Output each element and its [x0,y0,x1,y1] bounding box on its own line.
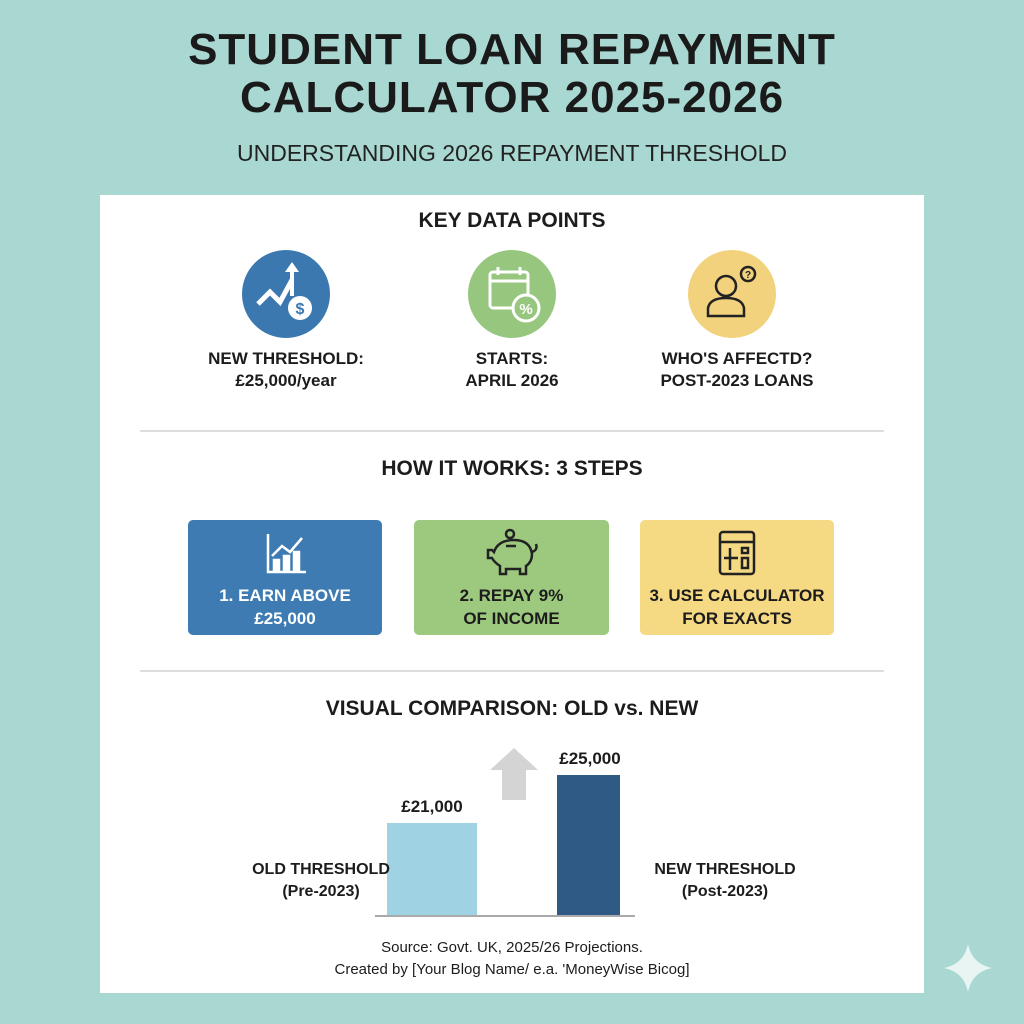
label: old: (Pre-2023) [282,883,360,900]
icon: calendar: % [519,301,533,318]
panel: main [100,195,924,993]
bar chart [252,748,796,917]
icon: threshold: $ [296,301,305,318]
title [188,25,836,122]
step 3: 3. USE CALCULATOR [649,586,825,605]
title: STUDENT LOAN REPAYMENT [188,25,836,74]
text: new threshold [208,349,364,390]
source text: Source: Govt. UK, 2025/26 Projections. [381,939,643,956]
bar chart: £21,000 [401,797,463,816]
icon: threshold [242,250,330,338]
text: who's affected: WHO'S AFFECTD? [662,349,812,368]
label: new: (Post-2023) [682,883,768,900]
source text [334,939,689,978]
icon: sparkle [944,944,992,992]
step 1: £25,000 [254,609,316,628]
subtitle: UNDERSTANDING 2026 REPAYMENT THRESHOLD [237,140,787,166]
label: new: NEW THRESHOLD [654,861,796,878]
source text: Created by [Your Blog Name/ e.a. 'MoneyWise Bicog] [334,961,689,978]
text: starts: STARTS: [476,349,548,368]
icon: person question [688,250,776,338]
heading: visual comparison: VISUAL COMPARISON: OLD vs. NEW [326,697,698,720]
text: starts [465,349,559,390]
step 2 [414,520,609,635]
text: who's affected [660,349,814,390]
bar: old [387,823,477,915]
step 1 [188,520,382,635]
title: CALCULATOR 2025-2026 [240,73,784,122]
label: old: OLD THRESHOLD [252,861,390,878]
heading: how it works: HOW IT WORKS: 3 STEPS [381,457,643,480]
icon: person question: ? [745,270,751,281]
step 2: OF INCOME [463,609,560,628]
step 1: 1. EARN ABOVE [219,586,351,605]
step 3: FOR EXACTS [682,609,792,628]
icon: calculator [718,530,756,576]
text: who's affected: POST-2023 LOANS [660,371,814,390]
label: new [654,861,796,900]
icon: piggy bank [486,528,538,576]
heading: key data points: KEY DATA POINTS [418,209,606,232]
bar chart: £25,000 [559,749,621,768]
label: old [252,861,390,900]
step 2: 2. REPAY 9% [460,586,563,605]
icon: chart [266,534,306,574]
step 3 [640,520,834,635]
bar: new [557,775,620,915]
text: starts: APRIL 2026 [465,371,559,390]
arrow: increase [490,748,538,800]
icon: calendar [468,250,556,338]
text: new threshold: £25,000/year [235,371,337,390]
text: new threshold: NEW THRESHOLD: [208,349,364,368]
